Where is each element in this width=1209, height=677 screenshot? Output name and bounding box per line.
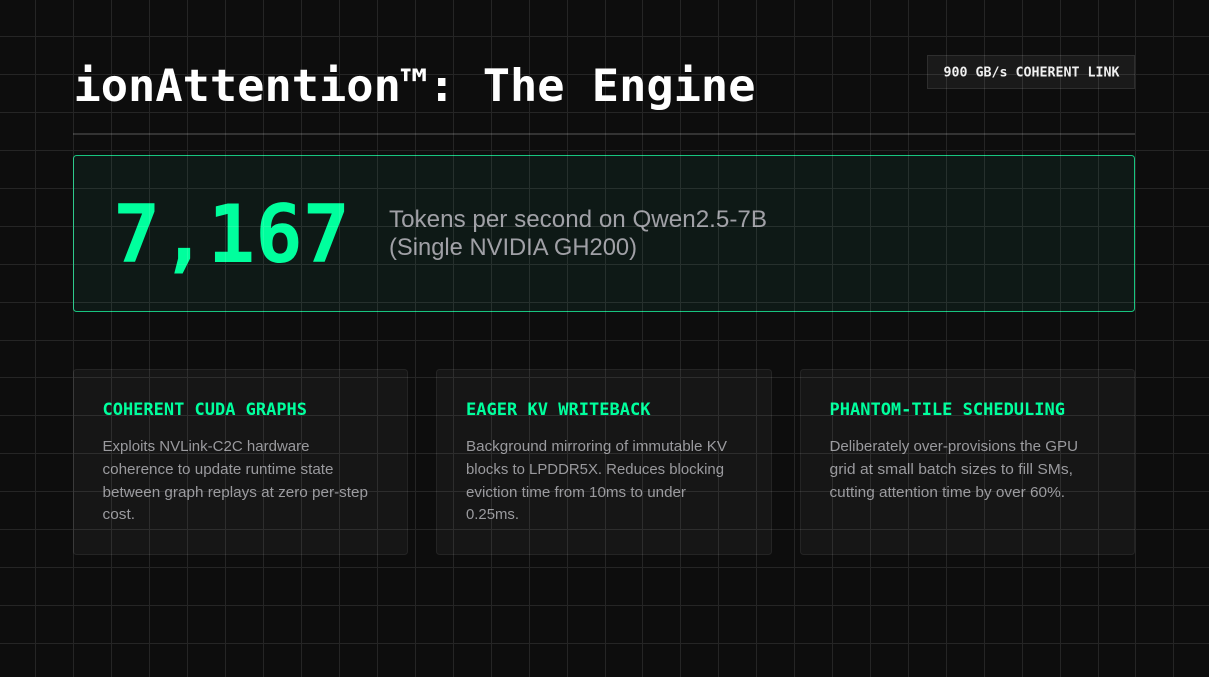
metric description: (Single NVIDIA GH200)	[389, 235, 637, 261]
metric description	[389, 207, 767, 261]
panel: phantom-tile scheduling	[800, 370, 1134, 554]
card body: blocks to LPDDR5X. Reduces blocking	[466, 462, 724, 478]
card body: Deliberately over-provisions the GPU	[830, 439, 1078, 455]
card body: cost.	[102, 507, 135, 523]
card body	[830, 439, 1078, 501]
card heading: PHANTOM-TILE SCHEDULING	[830, 399, 1065, 419]
card body	[102, 439, 368, 523]
card body	[466, 439, 727, 523]
metric value: 7,167	[113, 188, 350, 281]
header: title: ionAttention™: The Engine	[74, 60, 756, 112]
card body: grid at small batch sizes to fill SMs,	[830, 462, 1073, 478]
badge: coherent link: 900 GB/s COHERENT LINK	[944, 64, 1120, 80]
metric description: Tokens per second on Qwen2.5-7B	[389, 207, 767, 233]
card body: between graph replays at zero per-step	[102, 485, 368, 501]
panel: coherent CUDA graphs	[74, 370, 408, 554]
panel: headline metric	[74, 156, 1134, 312]
panel: eager KV writeback	[436, 370, 772, 554]
card heading: EAGER KV WRITEBACK	[466, 399, 651, 419]
card body: Exploits NVLink-C2C hardware	[102, 439, 310, 455]
card body: cutting attention time by over 60%.	[830, 485, 1065, 501]
badge: coherent link	[928, 56, 1134, 88]
card body: 0.25ms.	[466, 507, 519, 523]
card body: eviction time from 10ms to under	[466, 485, 686, 501]
card body: coherence to update runtime state	[102, 462, 334, 478]
card body: Background mirroring of immutable KV	[466, 439, 727, 455]
card heading: COHERENT CUDA GRAPHS	[102, 399, 307, 419]
